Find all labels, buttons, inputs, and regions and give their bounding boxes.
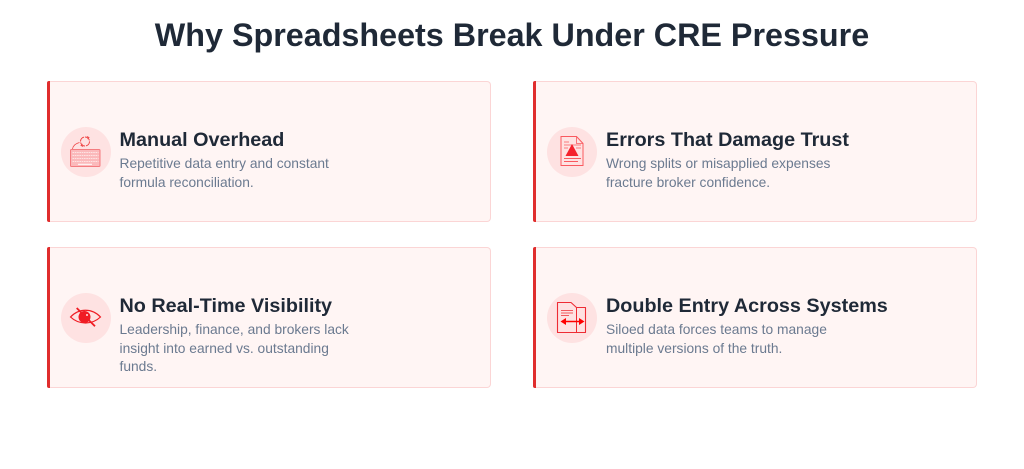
panel: double entry across systems [533, 247, 977, 388]
description [606, 156, 830, 190]
heading: Double Entry Across Systems [606, 295, 888, 317]
panel: manual overhead [47, 81, 491, 222]
icon: keyboard with refresh arrows [61, 127, 111, 177]
description: insight into earned vs. outstanding [120, 341, 329, 356]
description: Repetitive data entry and constant [120, 156, 329, 171]
description: multiple versions of the truth. [606, 341, 782, 356]
icon: crossed-out eye [61, 293, 111, 343]
icon: two documents with double arrow [547, 293, 597, 343]
description: funds. [120, 359, 157, 374]
description: Siloed data forces teams to manage [606, 322, 827, 337]
description [120, 322, 349, 374]
description [606, 322, 827, 356]
title: Why Spreadsheets Break Under CRE Pressure [155, 17, 869, 53]
panel: errors that damage trust [533, 81, 977, 222]
description: fracture broker confidence. [606, 175, 770, 190]
description: Leadership, finance, and brokers lack [120, 322, 349, 337]
heading: Manual Overhead [120, 129, 284, 151]
description [120, 156, 329, 190]
description: formula reconciliation. [120, 175, 254, 190]
description: Wrong splits or misapplied expenses [606, 156, 830, 171]
icon: document with warning triangle [547, 127, 597, 177]
heading: No Real-Time Visibility [120, 295, 332, 317]
panel: no real-time visibility [47, 247, 491, 388]
heading: Errors That Damage Trust [606, 129, 849, 151]
